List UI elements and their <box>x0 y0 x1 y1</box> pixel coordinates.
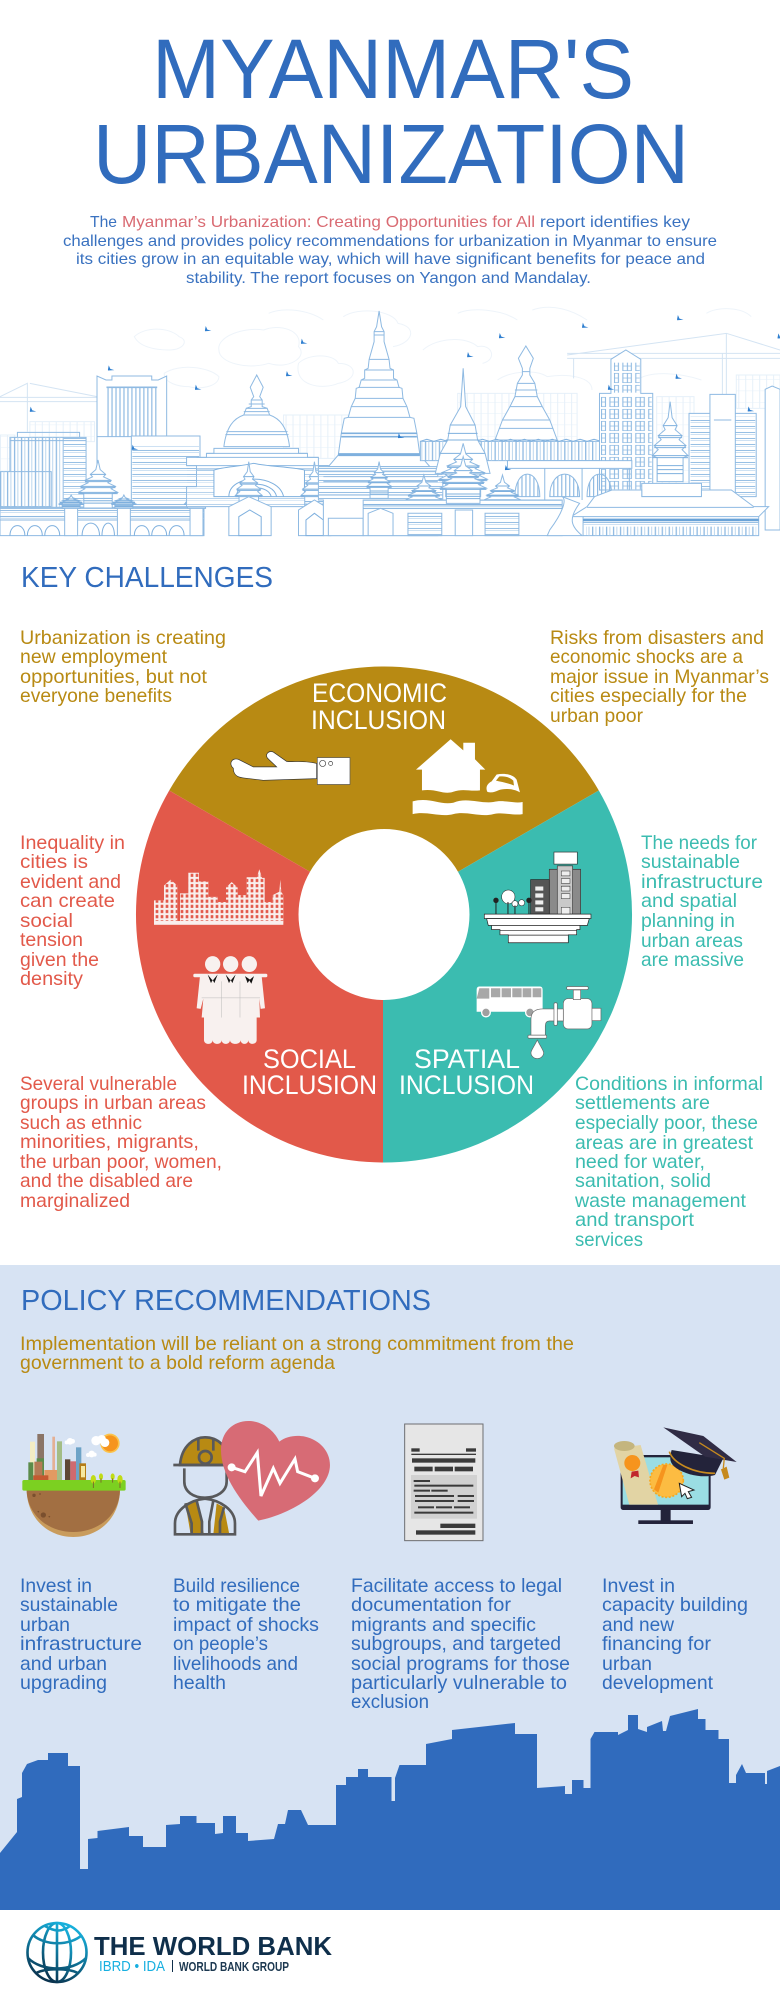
crane right <box>567 333 780 397</box>
text: build resilience: livelihoods and <box>173 1653 298 1675</box>
challenge text: infrastructure: infrastructure <box>641 871 763 893</box>
text: invest in infrastructure: Invest in <box>20 1575 92 1597</box>
text: capacity building: Invest in <box>602 1575 675 1597</box>
challenge text: disasters <box>550 627 769 727</box>
text: invest in infrastructure: and urban <box>20 1653 107 1675</box>
challenge text: inequality <box>20 832 125 990</box>
challenge text: infrastructure: planning in <box>641 910 735 932</box>
challenge text: employment: everyone benefits <box>20 685 172 707</box>
central hall <box>363 500 562 536</box>
challenge text: vulnerable groups <box>20 1073 222 1212</box>
tall pagoda <box>435 368 490 473</box>
subheading: Implementation will be reliant on a strong commitment from the <box>20 1333 574 1355</box>
challenge text: informal settlements: areas are in greatest <box>575 1132 754 1154</box>
challenge text: inequality: density <box>20 968 83 990</box>
text: capacity building <box>602 1575 748 1694</box>
challenge text: vulnerable groups: marginalized <box>20 1190 130 1212</box>
text: legal documentation: Facilitate access to legal <box>351 1575 562 1597</box>
text: capacity building: financing for <box>602 1633 712 1655</box>
challenge text: employment: new employment <box>20 646 168 668</box>
panel background <box>0 1265 780 1910</box>
birds <box>30 315 780 470</box>
lower hall <box>507 461 632 468</box>
inclusion wheel <box>136 666 632 1163</box>
challenge text: disasters: Risks from disasters and <box>550 627 764 649</box>
challenge text: inequality: evident and <box>20 871 121 893</box>
challenge text: disasters: cities especially for the <box>550 685 747 707</box>
city silhouette <box>0 1709 780 1910</box>
challenge text: employment: Urbanization is creating <box>20 627 226 649</box>
challenge text: infrastructure: and spatial <box>641 890 737 912</box>
icon: building on platform <box>484 852 591 943</box>
challenge text: informal settlements: settlements are <box>575 1092 710 1114</box>
text: capacity building: development <box>602 1672 714 1694</box>
text: legal documentation: particularly vulnerable to <box>351 1672 567 1694</box>
office centre left <box>131 436 200 507</box>
city skyline illustration <box>0 307 780 536</box>
text: capacity building: and new <box>602 1614 675 1636</box>
icon: island city <box>22 1434 126 1537</box>
text: legal documentation: migrants and specific <box>351 1614 536 1636</box>
challenge text: infrastructure <box>641 832 763 971</box>
heading: key challenges: KEY CHALLENGES <box>21 562 273 594</box>
challenge text: informal settlements: sanitation, solid <box>575 1170 711 1192</box>
crane left <box>0 383 97 432</box>
tagline ibrd ida: IBRD • IDA <box>99 1958 165 1975</box>
label: spatial inclusion <box>399 1044 534 1100</box>
intro text block <box>63 214 717 287</box>
tower left <box>97 376 167 500</box>
challenge text: vulnerable groups: the urban poor, women, <box>20 1151 222 1173</box>
challenge text: informal settlements: and transport <box>575 1209 695 1231</box>
challenge text: vulnerable groups: and the disabled are <box>20 1170 193 1192</box>
text: legal documentation: subgroups, and targeted <box>351 1633 561 1655</box>
icon: legal document <box>405 1424 483 1541</box>
challenge text: vulnerable groups: Several vulnerable <box>20 1073 177 1095</box>
text: invest in infrastructure: infrastructure <box>20 1633 142 1655</box>
left stupa <box>224 375 290 447</box>
text: legal documentation: exclusion <box>351 1691 429 1713</box>
challenge text: informal settlements: services <box>575 1229 643 1251</box>
text: legal documentation: documentation for <box>351 1594 512 1616</box>
title: MYANMAR'S <box>152 22 634 116</box>
challenge text: vulnerable groups: such as ethnic <box>20 1112 142 1134</box>
challenge text: vulnerable groups: groups in urban areas <box>20 1092 206 1114</box>
challenge text: employment <box>20 627 226 707</box>
challenge text: informal settlements: Conditions in informal <box>575 1073 763 1095</box>
challenge text: inequality: social <box>20 910 73 932</box>
label: spatial inclusion: SPATIAL <box>414 1044 520 1074</box>
intro text block: Myanmar’s Urbanization: Creating Opportunities for All <box>122 214 535 231</box>
icon: bus <box>477 987 543 1017</box>
divider <box>172 1960 173 1972</box>
intro text block: report identifies key <box>540 214 690 231</box>
intro text block: stability. The report focuses on Yangon and Mandalay. <box>186 270 591 287</box>
text: legal documentation: social programs for those <box>351 1653 570 1675</box>
icon: globe <box>28 1923 86 1982</box>
challenge text: inequality: tension <box>20 929 83 951</box>
challenge text: vulnerable groups: minorities, migrants, <box>20 1131 199 1153</box>
right stupa <box>495 346 557 440</box>
heading: policy recommendations: POLICY RECOMMENDATIONS <box>21 1285 431 1317</box>
wordmark: THE WORLD BANK <box>94 1931 332 1961</box>
arch canopy <box>214 463 304 497</box>
icon: water tap <box>528 987 601 1059</box>
logo: the world bank <box>28 1923 332 1982</box>
challenge text: informal settlements: waste management <box>574 1190 747 1212</box>
challenge text: infrastructure: urban areas <box>641 930 743 952</box>
label: economic inclusion: ECONOMIC <box>312 678 447 708</box>
text: invest in infrastructure <box>20 1575 142 1694</box>
challenge text: infrastructure: are massive <box>641 949 744 971</box>
icon: city skyline <box>154 869 283 925</box>
challenge text: disasters: economic shocks are a <box>550 646 743 668</box>
label: social inclusion <box>242 1044 377 1100</box>
text: build resilience: impact of shocks <box>173 1614 319 1636</box>
subheading: government to a bold reform agenda <box>20 1352 335 1374</box>
palace left <box>0 507 204 536</box>
text: build resilience: to mitigate the <box>173 1594 301 1616</box>
challenge text: inequality: Inequality in <box>20 832 125 854</box>
text: capacity building: capacity building <box>602 1594 748 1616</box>
right towers <box>599 350 653 490</box>
challenge text: disasters: urban poor <box>550 705 643 727</box>
challenge text: informal settlements: need for water, <box>575 1151 705 1173</box>
challenge text: employment: opportunities, but not <box>20 666 208 688</box>
label: spatial inclusion: INCLUSION <box>399 1070 534 1100</box>
segment: spatial inclusion <box>383 790 632 1163</box>
text: build resilience: Build resilience <box>173 1575 300 1597</box>
text: build resilience <box>173 1575 319 1694</box>
panel: policy recommendations <box>0 1265 780 1910</box>
text: build resilience: on people’s <box>173 1633 268 1655</box>
label: social inclusion: SOCIAL <box>263 1044 356 1074</box>
challenge text: informal settlements <box>574 1073 763 1251</box>
icon: open hand <box>231 751 350 784</box>
segment: economic inclusion <box>169 666 599 872</box>
challenge text: infrastructure: The needs for <box>641 832 757 854</box>
icon: flooded house and car <box>413 739 523 815</box>
text: invest in infrastructure: sustainable <box>20 1594 118 1616</box>
label: economic inclusion: INCLUSION <box>311 705 446 735</box>
office left <box>10 437 86 507</box>
main stupa <box>328 311 430 467</box>
icon: worker and heart <box>173 1421 330 1534</box>
text: legal documentation <box>351 1575 570 1713</box>
right pagoda <box>652 402 688 482</box>
challenge text: inequality: can create <box>20 890 115 912</box>
title <box>93 22 689 201</box>
text: build resilience: health <box>173 1672 226 1694</box>
subheading <box>20 1333 574 1374</box>
challenge text: inequality: cities is <box>20 851 88 873</box>
text: invest in infrastructure: urban <box>20 1614 70 1636</box>
segment: social inclusion <box>136 790 383 1162</box>
challenge text: infrastructure: sustainable <box>641 851 740 873</box>
icon: three professionals <box>193 956 267 1044</box>
label: social inclusion: INCLUSION <box>242 1070 377 1100</box>
tagline group: WORLD BANK GROUP <box>179 1959 289 1974</box>
label: economic inclusion <box>311 678 447 735</box>
challenge text: inequality: given the <box>20 949 99 971</box>
intro text block: challenges and provides policy recommendations for urbanization in Myanmar to ensure <box>63 233 717 250</box>
scalloped wall <box>420 441 632 461</box>
challenge text: informal settlements: especially poor, these <box>575 1112 758 1134</box>
intro text block: its cities grow in an equitable way, which will have significant benefits for peace and <box>76 251 705 268</box>
icon: online education <box>614 1427 737 1524</box>
title: URBANIZATION <box>93 107 689 201</box>
text: invest in infrastructure: upgrading <box>20 1672 107 1694</box>
intro text block: The <box>90 214 117 231</box>
text: capacity building: urban <box>602 1653 652 1675</box>
challenge text: disasters: major issue in Myanmar’s <box>550 666 769 688</box>
